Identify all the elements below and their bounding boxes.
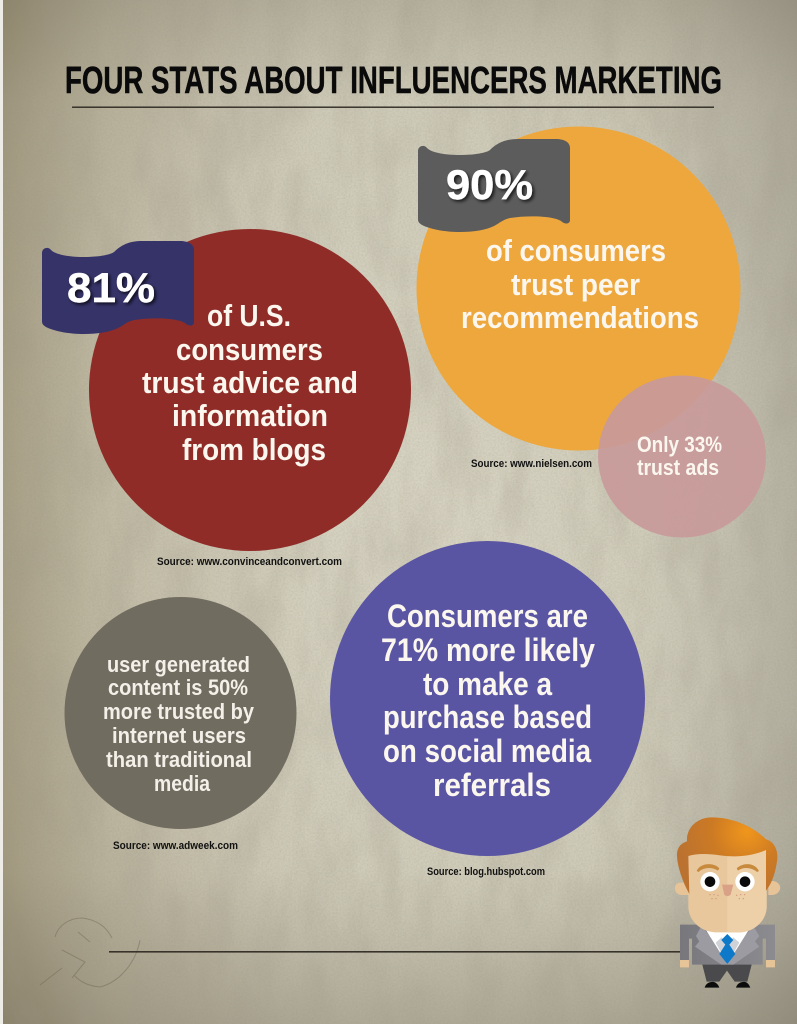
suit — [680, 925, 775, 965]
icon: businessman character — [675, 817, 780, 988]
bottom divider line — [109, 951, 684, 953]
stat text: social referrals: to make a — [423, 666, 552, 702]
source: hubspot: Source: blog.hubspot.com — [427, 866, 545, 878]
shirt — [705, 928, 750, 964]
panel: 90% peer recommendations stat — [416, 126, 740, 470]
source: nielsen: Source: www.nielsen.com — [471, 458, 592, 470]
source: adweek: Source: www.adweek.com — [113, 840, 238, 852]
panel: 33% trust ads — [598, 376, 766, 538]
purple circle — [330, 541, 645, 856]
stat text: social referrals: Consumers are — [387, 598, 588, 634]
panel: social media referrals stat — [330, 541, 645, 878]
stat text: social referrals: on social media — [383, 733, 591, 769]
stat text: social referrals: referrals — [433, 767, 551, 803]
legs — [702, 963, 752, 982]
decorative stamp sketch — [40, 918, 140, 987]
red circle — [89, 229, 411, 551]
eyebrows — [697, 864, 759, 872]
stat text: blogs — [142, 298, 358, 467]
stat text: user generated content: than traditional — [106, 747, 252, 772]
stat text: user generated content: internet users — [112, 723, 246, 748]
hands — [680, 960, 775, 967]
stat text: blogs: from blogs — [182, 432, 326, 467]
source: convinceandconvert: Source: www.convinceandconvert.com — [157, 556, 342, 568]
gray ribbon with 90%: 90% — [446, 161, 533, 208]
panel: user generated content stat — [64, 597, 296, 852]
orange circle — [416, 126, 740, 450]
hair — [677, 817, 777, 894]
stat text: social referrals: purchase based — [383, 699, 592, 735]
freckles — [709, 894, 745, 899]
stat text: peer recommendations — [461, 233, 699, 335]
face — [688, 847, 767, 932]
stat text: peer recommendations: of consumers — [486, 233, 666, 268]
stat text: user generated content: media — [154, 771, 211, 796]
tie — [719, 934, 735, 964]
shoes — [705, 982, 750, 988]
stat text: trust ads: trust ads — [637, 455, 719, 480]
navy ribbon with 81%: 81% — [67, 264, 155, 311]
olive circle — [64, 597, 296, 829]
ears — [675, 881, 780, 895]
stat text: blogs: trust advice and — [142, 365, 358, 400]
stat text: user generated content — [103, 652, 255, 796]
stat text: user generated content: more trusted by — [103, 699, 255, 724]
stat text: trust ads: Only 33% — [637, 432, 722, 457]
panel: 81% blogs stat — [42, 229, 411, 568]
stat text: trust ads — [637, 432, 722, 480]
eyes — [700, 872, 720, 891]
stat text: user generated content: content is 50% — [108, 675, 248, 700]
nose — [722, 885, 733, 896]
stat text: blogs: information — [172, 398, 328, 433]
stat text: social referrals — [381, 598, 595, 803]
pink circle — [598, 376, 766, 538]
lapels — [695, 926, 759, 965]
stat text: peer recommendations: recommendations — [461, 300, 699, 335]
stat text: social referrals: 71% more likely — [381, 632, 595, 668]
stat text: peer recommendations: trust peer — [511, 267, 640, 302]
gray ribbon with 90% — [418, 139, 570, 232]
stat text: user generated content: user generated — [107, 652, 250, 677]
stat text: blogs: consumers — [176, 332, 323, 367]
stat text: blogs: of U.S. — [207, 298, 291, 333]
navy ribbon with 81% — [42, 241, 194, 334]
collar shadow — [716, 937, 739, 958]
title underline — [72, 106, 714, 108]
